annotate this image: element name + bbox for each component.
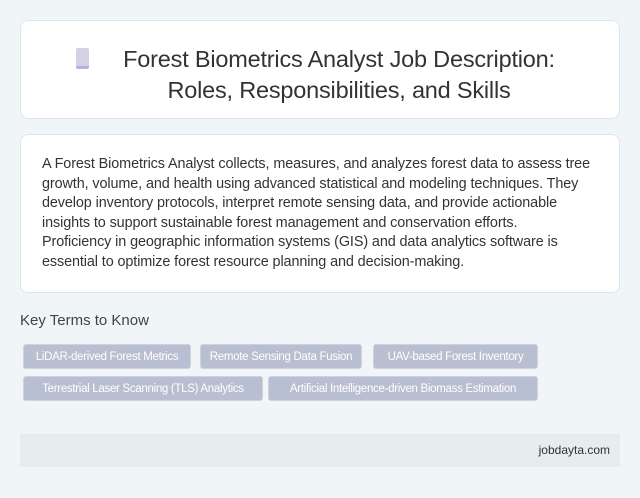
title: Roles, Responsibilities, and Skills bbox=[167, 77, 511, 103]
tag: Artificial Intelligence-driven Biomass Estimation bbox=[290, 383, 516, 395]
icon: document bbox=[76, 48, 89, 69]
description text bbox=[42, 156, 590, 270]
tag bbox=[23, 376, 263, 401]
footer text: jobdayta.com bbox=[539, 443, 610, 457]
tag: LiDAR-derived Forest Metrics bbox=[36, 351, 178, 363]
description text: develop inventory protocols, interpret remote sensing data, and provide actionable bbox=[42, 195, 557, 211]
description text: insights to support sustainable forest management and conservation efforts. bbox=[42, 214, 517, 230]
tag bbox=[200, 344, 362, 369]
description text: growth, volume, and health using advanced statistical and modeling techniques. They bbox=[42, 176, 578, 192]
title bbox=[123, 46, 555, 103]
tag bbox=[268, 376, 538, 401]
title: Forest Biometrics Analyst Job Description: bbox=[123, 46, 555, 72]
footer bbox=[20, 434, 620, 467]
tag bbox=[373, 344, 538, 369]
tag bbox=[23, 344, 191, 369]
description card bbox=[20, 134, 620, 293]
description text: essential to optimize forest resource planning and decision-making. bbox=[42, 254, 464, 270]
key terms heading: Key Terms to Know bbox=[20, 312, 149, 329]
tag: Terrestrial Laser Scanning (TLS) Analytics bbox=[42, 383, 244, 395]
key terms tags bbox=[23, 344, 538, 401]
description text: Proficiency in geographic information systems (GIS) and data analytics software is bbox=[42, 234, 558, 250]
tag: Remote Sensing Data Fusion bbox=[210, 351, 352, 363]
title card bbox=[20, 20, 620, 119]
tag: UAV-based Forest Inventory bbox=[388, 351, 523, 363]
description text: A Forest Biometrics Analyst collects, measures, and analyzes forest data to assess tree bbox=[42, 156, 590, 172]
